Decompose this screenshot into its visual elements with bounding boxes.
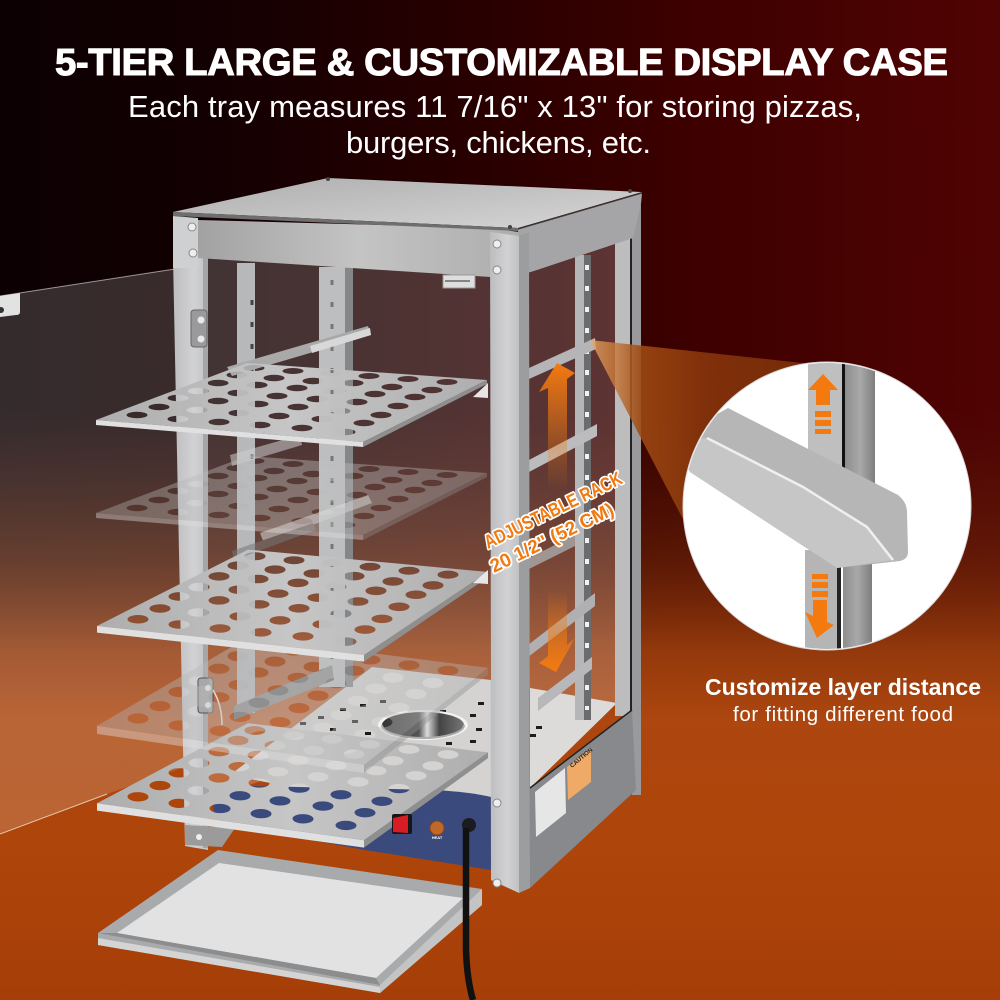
navy control base [210, 785, 491, 870]
right back post [319, 267, 353, 687]
floor plate [230, 667, 491, 805]
door hinge upper [191, 310, 207, 347]
up arrow with stripes [808, 374, 838, 434]
glass door, open to the left [0, 268, 190, 834]
title: 5-TIER LARGE & CUSTOMIZABLE DISPLAY CASE [55, 41, 948, 84]
callout light cone [590, 340, 830, 525]
bottom tray 5 [97, 720, 488, 850]
translucent tray 4 [97, 635, 488, 775]
top lid and header [173, 177, 642, 277]
left back post [237, 263, 255, 713]
rating label [535, 768, 566, 837]
middle right post [575, 255, 591, 720]
left front post [173, 258, 235, 850]
lower post [805, 550, 837, 650]
down arrow with stripes [805, 574, 834, 638]
case floor and drawn base [210, 667, 617, 870]
door latch plate [0, 293, 20, 317]
right side rack rails [528, 338, 597, 711]
vent holes [300, 700, 542, 745]
adjustable arrow down [539, 590, 575, 672]
control switch and heat lamp: HEAT [432, 835, 443, 840]
rail bracket [670, 408, 908, 568]
adjustable rack label [481, 468, 626, 577]
adjustable rack label: ADJUSTABLE RACK [481, 468, 626, 553]
door hinge lower [198, 678, 222, 725]
base side panel with labels [530, 710, 636, 888]
right rear corner post [615, 205, 641, 795]
magnetic door catch [443, 275, 475, 288]
adjustable arrow up [539, 363, 575, 490]
stainless pot well [378, 710, 468, 740]
power cord [466, 828, 473, 1000]
crumb tray [98, 850, 482, 993]
subtitle line two: burgers, chickens, etc. [346, 125, 651, 160]
tray 1 [96, 363, 488, 447]
control switch and heat lamp [392, 814, 476, 840]
caution label [567, 747, 594, 800]
translucent tray 2 [96, 456, 487, 540]
tray 3 [97, 549, 488, 662]
callout subtext: for fitting different food [733, 703, 953, 726]
rack rails on left side [227, 326, 372, 720]
subtitle line one: Each tray measures 11 7/16" x 13" for storing pizzas, [128, 89, 862, 124]
caution label: CAUTION [569, 747, 594, 770]
circular zoom callout [670, 360, 971, 650]
adjustable rack label: 20 1/2" (52 CM) [487, 499, 618, 577]
upper post [808, 363, 842, 466]
front right corner post [490, 232, 530, 893]
display case glass interior [207, 240, 616, 800]
callout heading: Customize layer distance [705, 674, 981, 700]
